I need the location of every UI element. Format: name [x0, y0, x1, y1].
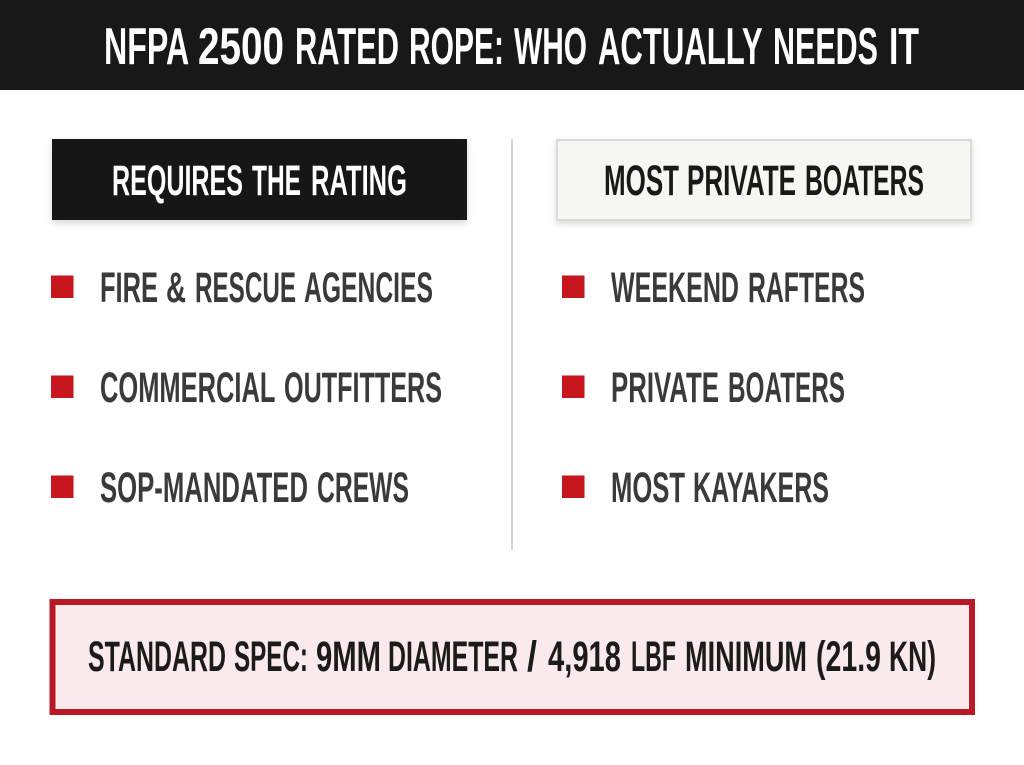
callout: standard spec: STANDARD	[88, 633, 226, 681]
list item: most kayakers	[562, 464, 829, 512]
heading: most private boaters: MOST	[604, 157, 679, 205]
list item: most kayakers: MOST	[611, 464, 685, 512]
panel: requires the rating	[51, 139, 467, 512]
callout: standard spec: 4,918	[548, 633, 621, 681]
list item: fire and rescue agencies	[51, 264, 433, 312]
list item: fire and rescue agencies: &	[166, 264, 186, 312]
title banner: ACTUALLY	[598, 18, 762, 76]
list item: private boaters: PRIVATE	[611, 364, 719, 412]
callout: standard spec: KN)	[889, 633, 936, 681]
callout: standard spec: (21.9	[816, 633, 881, 681]
list item: private boaters: BOATERS	[728, 364, 845, 412]
list item: weekend rafters: RAFTERS	[748, 264, 865, 312]
title banner: NFPA	[104, 18, 189, 76]
title banner: 2500	[198, 18, 284, 76]
title banner: RATED	[295, 18, 399, 76]
list item: fire and rescue agencies: AGENCIES	[304, 264, 433, 312]
list item: fire and rescue agencies: RESCUE	[195, 264, 296, 312]
title banner: WHO	[514, 18, 587, 76]
list item: private boaters	[562, 364, 845, 412]
callout: standard spec: SPEC:	[234, 633, 308, 681]
heading: requires the rating	[52, 139, 467, 220]
list item: fire and rescue agencies: FIRE	[100, 264, 158, 312]
list item: weekend rafters: WEEKEND	[611, 264, 739, 312]
heading: requires the rating: THE	[252, 157, 301, 205]
callout: standard spec: LBF	[631, 633, 676, 681]
title banner	[0, 0, 1024, 90]
panel: most private boaters	[557, 140, 971, 512]
heading: requires the rating: REQUIRES	[112, 157, 243, 205]
heading: most private boaters: BOATERS	[805, 157, 924, 205]
heading: requires the rating: RATING	[311, 157, 407, 205]
list item: sop-mandated crews: CREWS	[317, 464, 409, 512]
list item: most kayakers: KAYAKERS	[693, 464, 829, 512]
callout: standard spec: 9MM	[316, 633, 381, 681]
heading: most private boaters: PRIVATE	[687, 157, 796, 205]
callout: standard spec: DIAMETER	[388, 633, 518, 681]
heading: most private boaters	[557, 140, 971, 220]
callout: standard spec: MINIMUM	[685, 633, 807, 681]
callout: standard spec: /	[527, 633, 537, 681]
title banner: NEEDS	[773, 18, 878, 76]
list item: commercial outfitters: OUTFITTERS	[284, 364, 442, 412]
list item: commercial outfitters: COMMERCIAL	[100, 364, 275, 412]
list item: sop-mandated crews: SOP-MANDATED	[100, 464, 308, 512]
callout: standard spec	[52, 602, 972, 712]
title banner: IT	[889, 18, 919, 76]
title banner: ROPE:	[409, 18, 504, 76]
